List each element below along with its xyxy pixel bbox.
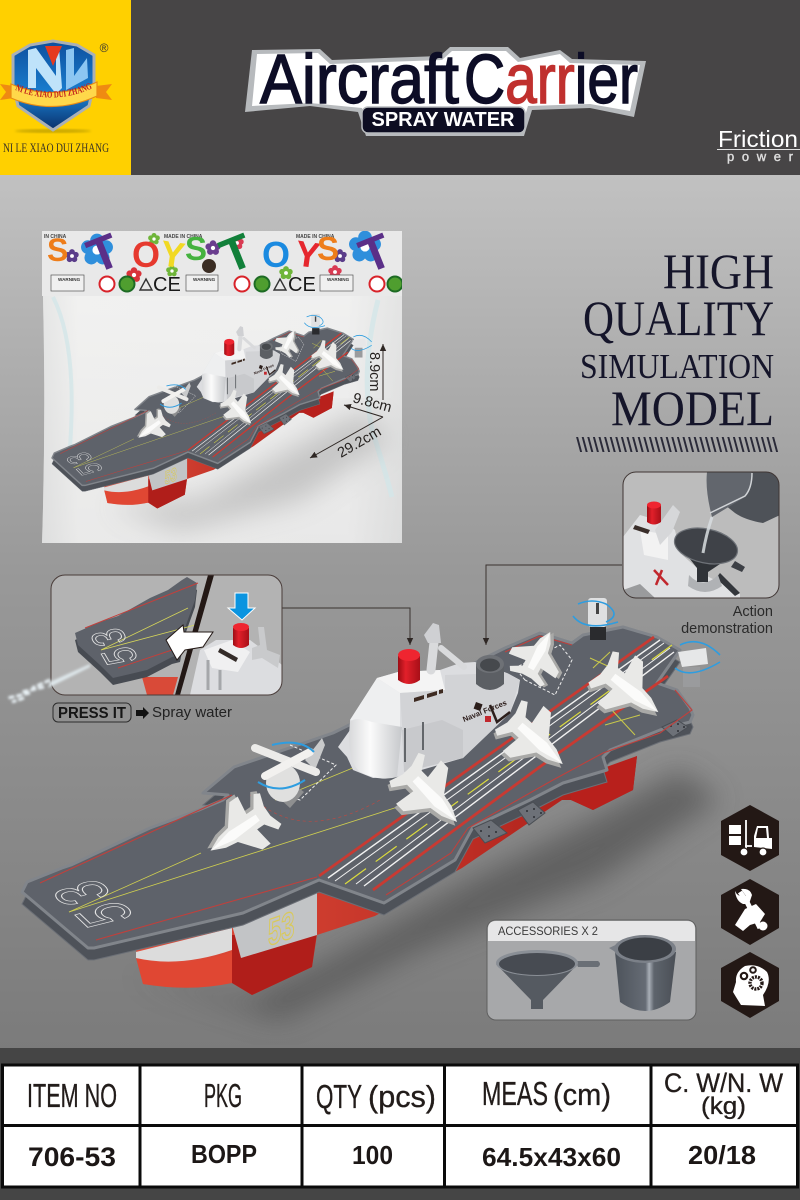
bag header strip: T [213, 224, 260, 284]
accessories heading: ACCESSORIES X 2 [498, 926, 598, 938]
dimension labels: 9.8cm [351, 390, 393, 416]
direction arrow: press down [228, 593, 255, 620]
poly bag body [42, 296, 402, 543]
island superstructure [338, 623, 520, 779]
action caption: Action [733, 604, 773, 620]
red button [398, 656, 420, 684]
feature headline [580, 243, 774, 436]
page background [0, 175, 800, 1050]
title logo: Aircraft Carrier [245, 40, 646, 136]
white hull section [232, 893, 317, 958]
table values: 20/18 [688, 1140, 756, 1170]
bag header strip [42, 224, 402, 296]
friction power badge [717, 126, 800, 164]
red hull [136, 756, 637, 995]
main ship shadow [130, 770, 720, 1020]
hull decal text: Naval Forces [461, 698, 508, 724]
bag header strip: MADE IN CHINA [164, 234, 203, 240]
flight deck edge [22, 639, 693, 960]
rotating deck unit: rear [573, 598, 618, 640]
funnel accessory [496, 950, 600, 1009]
bag header strip: T [352, 224, 399, 284]
bag header strip: O [262, 234, 290, 275]
dimension labels: 8.9cm [366, 352, 382, 392]
action leader line [486, 565, 622, 645]
table headers: C. W/N. W [664, 1068, 783, 1098]
feature icon: head with gears [721, 952, 779, 1018]
bag header strip: WARNING [327, 277, 350, 282]
jet 1 [191, 782, 287, 875]
bag header strip: O [132, 234, 160, 275]
feature headline: HIGH [663, 243, 774, 299]
table values: BOPP [191, 1139, 257, 1169]
press inset panel: 53 [79, 621, 149, 669]
action inset panel [623, 472, 780, 598]
dimension labels [335, 352, 393, 461]
table headers: ITEM NO [27, 1077, 117, 1114]
funnel [476, 664, 504, 690]
bag header strip: T [80, 224, 127, 284]
title logo: Aircraft Carrier: SPRAY WATER [372, 109, 515, 131]
brand logo shield [0, 40, 112, 134]
feature headline: QUALITY [583, 290, 774, 346]
table headers: PKG [204, 1077, 242, 1114]
table values: 706-53 [28, 1142, 116, 1172]
header band [0, 0, 800, 175]
bag header strip: S [317, 230, 339, 267]
bag header strip: WARNING [193, 277, 216, 282]
feature headline: MODEL [611, 380, 774, 436]
action caption: demonstration [681, 621, 773, 637]
brand name: NI LE XIAO DUI ZHANG [3, 140, 109, 155]
deck number 53: 53 [32, 869, 151, 934]
brand logo shield: NI LE XIAO DUI ZHANG [15, 83, 92, 98]
jet 2 [379, 745, 481, 847]
pitcher in use [725, 472, 780, 523]
table headers: MEAS [482, 1075, 548, 1112]
water stream [703, 517, 712, 553]
specification footer [0, 1048, 800, 1200]
jet 4 [579, 643, 678, 740]
deck red trim [40, 636, 692, 940]
dimension arrows [310, 344, 383, 458]
small carrier photo [52, 314, 372, 508]
table headers [27, 1068, 783, 1120]
packaged product photo [42, 224, 402, 543]
brand panel [0, 0, 131, 175]
feature icon: hand and wrench [721, 879, 779, 945]
press inset panel [51, 575, 282, 695]
bag header strip: Y [293, 232, 322, 276]
bag header strip: S [47, 232, 68, 268]
friction power badge: power [727, 149, 794, 164]
brand logo shield: ® [100, 41, 109, 55]
direction arrow: water flow [166, 625, 213, 660]
funnel in use [690, 559, 720, 582]
bag header strip: MADE IN CHINA [296, 234, 335, 240]
angled runway [69, 637, 674, 912]
rotating deck unit: elevator [675, 642, 720, 687]
table values [28, 1139, 756, 1172]
bag header strip: S [185, 230, 207, 267]
table headers: (cm) [553, 1077, 611, 1112]
title logo: Aircraft Carrier: Aircraft [260, 40, 459, 118]
table values: 64.5x43x60 [482, 1142, 621, 1172]
deck bolt plates [473, 720, 688, 843]
mast [431, 642, 464, 670]
pitcher accessory [609, 935, 676, 1011]
helicopter [255, 738, 325, 808]
table headers: QTY [316, 1078, 362, 1115]
press it label: PRESS IT [58, 705, 126, 722]
friction power badge: Friction [718, 126, 798, 152]
water spray [8, 664, 90, 702]
bag header strip: WARNING [58, 277, 81, 282]
eyelet hole [202, 259, 216, 273]
bag header strip: CE [288, 274, 316, 296]
bag header strip: IN CHINA [44, 234, 67, 240]
jet 5 [502, 619, 577, 693]
table values: 100 [352, 1140, 393, 1170]
feature icon: forklift and cartons [721, 805, 779, 871]
press it label [53, 703, 232, 722]
dimension labels: 29.2cm [335, 424, 384, 461]
bag header strip: Y [158, 232, 187, 276]
feature headline: SIMULATION [580, 347, 774, 386]
press it label: Spray water [152, 705, 232, 721]
action demonstration callout [486, 472, 780, 645]
accessories panel [487, 920, 696, 1020]
flight deck top [22, 627, 693, 948]
specification table [2, 1065, 798, 1187]
table headers: (pcs) [368, 1079, 436, 1114]
title logo: Aircraft Carrier: Carrier [464, 40, 638, 118]
shadow under small ship [110, 410, 390, 530]
red hull: 53 [268, 903, 294, 954]
action caption [681, 604, 773, 637]
jet 3 [485, 692, 584, 790]
press callout [8, 575, 410, 722]
press leader line [282, 608, 410, 645]
subtitle badge [362, 107, 525, 133]
table headers: (kg) [701, 1093, 746, 1120]
main carrier illustration [22, 598, 720, 995]
bag header strip: CE [153, 274, 181, 296]
